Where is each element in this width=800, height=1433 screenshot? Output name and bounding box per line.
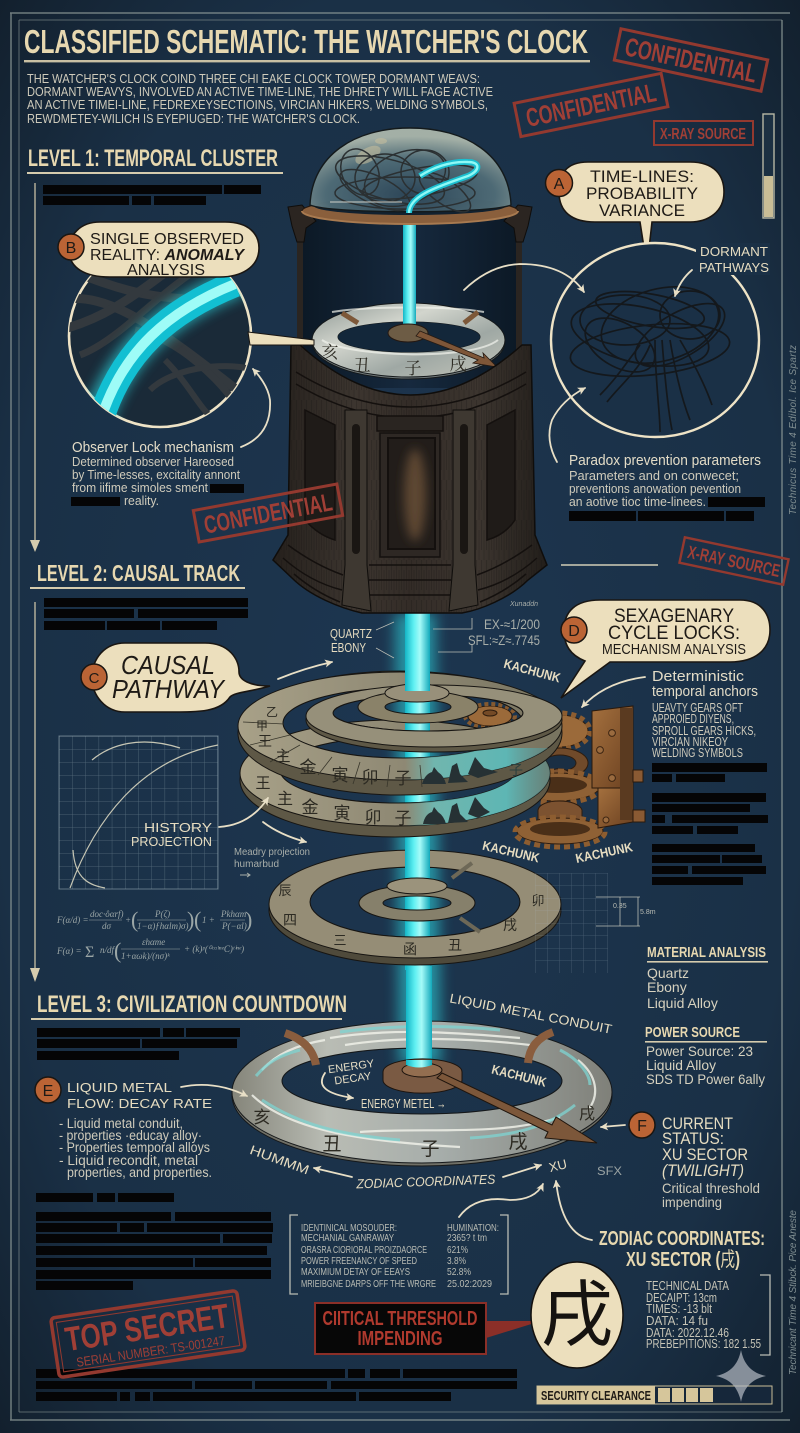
- spec readout: SFL:≈Z≈.7745: [468, 633, 540, 648]
- data table: 2365? t tm: [447, 1232, 487, 1244]
- security clearance bar: SECURITY CLEARANCE: [541, 1388, 651, 1403]
- data table: POWER FREENANCY OF SPEED: [301, 1255, 417, 1267]
- arrow: table to xu: [459, 1184, 543, 1217]
- material analysis: Liquid Alloy: [647, 995, 718, 1011]
- label: energy metel: ENERGY METEL →: [361, 1096, 446, 1111]
- callout E: liquid metal flow: LIQUID METAL: [67, 1080, 172, 1095]
- magnifier A: dormant pathways: [551, 243, 759, 437]
- data table: 25.02:2029: [447, 1278, 492, 1290]
- formulas: [56, 907, 252, 963]
- formulas: (: [114, 938, 121, 963]
- upper sexagenary ring: 王: [258, 733, 272, 749]
- callout A: time-lines: [546, 162, 724, 267]
- power source: Power Source: 23: [646, 1043, 753, 1059]
- zodiac glyphs: 亥: [254, 1108, 270, 1127]
- data table: MECHANIAL GANRAWAY: [301, 1232, 394, 1244]
- intro text: DORMANT WEAVYS, INVOLVED AN ACTIVE TIME-LINE, THE DHRETY WILL FAGE ACTIVE: [27, 85, 493, 99]
- zodiac glyphs: 戌: [508, 1131, 528, 1153]
- callout E: liquid metal flow: FLOW: DECAY RATE: [67, 1096, 212, 1111]
- arrow to magnifier A: [464, 264, 584, 292]
- callout F: current status: XU SECTOR: [662, 1145, 748, 1164]
- text: observer lock: Determined observer Hareosed: [72, 455, 234, 469]
- redacted text level 2: [44, 598, 248, 630]
- clock tower: [273, 128, 547, 613]
- heading: level 2: LEVEL 2: CAUSAL TRACK: [37, 560, 240, 586]
- power source: Liquid Alloy: [646, 1057, 716, 1073]
- lower history ring: 主: [277, 790, 293, 808]
- data table: MRIEIBGNE DARPS OFF THE WRGRE: [301, 1278, 436, 1290]
- stamp: x-ray source: X-RAY SOURCE: [660, 126, 746, 143]
- silver ring: 戌: [450, 350, 466, 375]
- technical data: TIMES: -13 blt: [646, 1301, 712, 1316]
- front lip of rim: [302, 211, 518, 224]
- stamp: x-ray source: [654, 121, 753, 145]
- formulas: Pkhαm: [220, 909, 247, 919]
- data table: MAXIMIUM DETAY OF EEAYS: [301, 1266, 410, 1278]
- redacted text right column: [652, 763, 768, 885]
- arrow: liquid metal flow: [181, 1085, 247, 1096]
- copper rim: [302, 197, 518, 224]
- text: paradox prevention: preventions anowation pevention: [569, 482, 741, 496]
- note: meadry projection: humarbud: [234, 859, 279, 870]
- arrow: causal pathway: [278, 662, 332, 679]
- silver ring: 亥: [322, 338, 338, 363]
- spec readout: Xunaddn: [509, 601, 538, 608]
- hub and needle: [388, 324, 497, 367]
- arrow: deterministic anchors: [582, 677, 645, 707]
- beam between rings: [405, 720, 430, 760]
- small grid with dimensions: 0.35: [613, 903, 627, 910]
- label: energy decay: DECAY: [334, 1070, 373, 1087]
- formulas: P(−αl): [221, 921, 247, 931]
- lower history ring: [240, 720, 550, 837]
- silver ring: [312, 303, 505, 379]
- material analysis: Quartz: [647, 965, 689, 981]
- callout A: time-lines: VARIANCE: [599, 201, 685, 220]
- upper sexagenary ring: 主: [275, 748, 291, 765]
- upper sexagenary ring: 寅: [332, 766, 348, 785]
- lower zodiac ring: 辰: [278, 883, 292, 898]
- note: meadry projection: Meadry projection: [234, 847, 310, 858]
- redacted text level 1: [43, 185, 261, 205]
- lower zodiac ring: 四: [283, 912, 297, 928]
- callout F: current status: CURRENT: [662, 1114, 733, 1133]
- middle inner ring: [306, 685, 562, 752]
- redacted text block lower left: [36, 1193, 273, 1290]
- label: hummm: HUMMM: [248, 1142, 311, 1177]
- callout C: causal pathway: PATHWAY: [112, 674, 226, 704]
- data table: [290, 1215, 508, 1294]
- callout F: current status: [601, 1112, 760, 1210]
- upper sexagenary ring: 子: [394, 769, 412, 788]
- spec readout: [433, 601, 540, 652]
- silver ring: 子: [404, 354, 422, 379]
- gauge: [763, 114, 774, 218]
- callout F: current status: STATUS:: [662, 1129, 724, 1148]
- redacted text bottom: [36, 1369, 517, 1401]
- stamp: top secret: TOP SECRET: [63, 1297, 232, 1359]
- upper sexagenary ring: [238, 671, 562, 795]
- power source: [645, 1024, 767, 1087]
- list: liquid metal properties: - Properties temporal alloys: [59, 1140, 210, 1155]
- liquid metal ring: [232, 1021, 612, 1166]
- text: deterministic anchors: UEAVTY GEARS OFT: [652, 701, 743, 715]
- graph: [59, 736, 218, 889]
- data table: 3.8%: [447, 1255, 466, 1267]
- stamp: confidential 2: CONFIDENTIAL: [523, 77, 659, 133]
- callout A: time-lines: PROBABILITY: [586, 184, 698, 203]
- divider right: [561, 564, 658, 566]
- stamp: confidential 1: [614, 29, 768, 91]
- zodiac medallion: 戌: [541, 1256, 613, 1361]
- lower history ring: 卯: [364, 808, 382, 827]
- label: dormant pathways: PATHWAYS: [699, 260, 769, 275]
- tower body: [273, 345, 547, 613]
- lower history ring: 金: [302, 798, 318, 817]
- arrow: heading to xu: [556, 1181, 592, 1240]
- arrow: history to ring: [219, 798, 268, 827]
- zodiac glyphs: [254, 1105, 595, 1160]
- side annotations: Technicant Time 4 Stibck. Pice Aneste: [788, 1210, 799, 1375]
- text: paradox prevention: Parameters and on conwecet;: [569, 469, 739, 483]
- text: deterministic anchors: [652, 668, 758, 760]
- label: liquid metal conduit: LIQUID METAL CONDUIT: [448, 990, 613, 1037]
- material callouts: quartz, ebony: EBONY: [331, 640, 366, 655]
- text: deterministic anchors: SPROLL GEARS HICKS,: [652, 724, 756, 738]
- text: observer lock: [71, 440, 244, 508]
- text: deterministic anchors: VIRCIAN NIKEOY: [652, 735, 728, 749]
- upper sexagenary ring: 卯: [362, 768, 378, 787]
- lower zodiac ring: 三: [333, 933, 347, 948]
- label: history projection: [131, 820, 212, 849]
- technical data: DECAIPT: 13cm: [646, 1290, 717, 1305]
- lower zodiac ring: 卯: [531, 893, 545, 908]
- intro text: REWDMETEY-WILICH IS EYEPIUGED: THE WATCHER'S CLOCK.: [27, 112, 360, 126]
- callout B: single observed reality: SINGLE OBSERVED: [90, 231, 244, 248]
- text: observer lock: by Time-lesses, excitality annont: [72, 468, 240, 482]
- list: liquid metal properties: - properties ·educay alloy·: [59, 1128, 202, 1143]
- label: kachunk ring: KACHUNK: [490, 1062, 549, 1090]
- formulas: 1+αωk)/(nσ)ᵏ: [121, 951, 170, 961]
- intro text: [27, 72, 493, 126]
- upper sexagenary ring: 甲: [256, 719, 268, 733]
- formulas: 1 +: [202, 915, 215, 925]
- hub and pointer: [383, 1059, 597, 1143]
- text: paradox prevention: an aotive tioc time-linees.: [569, 495, 706, 509]
- callout B: single observed reality: B: [66, 240, 76, 257]
- material analysis: Ebony: [647, 979, 687, 995]
- label: history projection: HISTORY: [144, 820, 212, 835]
- warning box: critical threshold: CIITICAL THRESHOLD: [322, 1308, 478, 1330]
- text: deterministic anchors: WELDING SYMBOLS: [652, 746, 743, 760]
- stamp: confidential 2: [514, 73, 668, 137]
- stamp: top secret: [51, 1290, 245, 1378]
- flow line level 1 to 2: [30, 183, 40, 552]
- text: deterministic anchors: APPROIED DIYENS,: [652, 712, 734, 726]
- text: paradox prevention: [569, 453, 765, 521]
- arrow: to xu: [503, 1165, 541, 1177]
- lower history ring: 寅: [334, 804, 350, 823]
- upper sexagenary ring: 金: [300, 758, 316, 777]
- heading: zodiac coordinates xu sector: [599, 1228, 765, 1272]
- arrow: to hummm: [314, 1168, 352, 1177]
- arrow: observer lock: [241, 369, 270, 447]
- text: observer lock: Observer Lock mechanism: [72, 440, 234, 456]
- note: meadry projection: [234, 847, 310, 877]
- callout D: sexagenary cycle locks: D: [568, 623, 580, 640]
- callout C: causal pathway: [81, 643, 270, 712]
- zodiac glyphs: 戌: [579, 1105, 595, 1123]
- technical data: PREBEPITIONS: 182 1.55: [646, 1336, 761, 1351]
- formulas: εhαme: [142, 937, 165, 947]
- stamp: top secret: SERIAL NUMBER: TS-001247: [75, 1333, 226, 1370]
- power source: POWER SOURCE: [645, 1024, 740, 1041]
- lower history ring: 王: [255, 775, 271, 792]
- label: energy decay: [327, 1058, 377, 1088]
- callout B: single observed reality: REALITY: ANOMALY: [90, 247, 245, 264]
- label: kachunk left: KACHUNK: [481, 838, 541, 866]
- zodiac glyphs: 子: [420, 1139, 440, 1160]
- security clearance bar: [537, 1386, 772, 1404]
- spec readout: EX-≈1/200: [484, 617, 540, 632]
- data table: 621%: [447, 1244, 468, 1256]
- icon: sparkle watermark: [716, 1350, 766, 1402]
- label: dormant pathways: [696, 243, 770, 275]
- material analysis: [647, 944, 768, 1011]
- callout A: time-lines: A: [554, 176, 565, 193]
- formulas: +: [125, 915, 131, 925]
- formulas: n/df: [100, 945, 116, 955]
- text: observer lock: reality.: [124, 494, 159, 508]
- label: xu: XU: [547, 1156, 568, 1175]
- heading: level 1: LEVEL 1: TEMPORAL CLUSTER: [28, 145, 278, 172]
- technical data: [646, 1275, 770, 1355]
- bracket plate: [592, 706, 645, 828]
- formulas: Σ: [85, 944, 94, 961]
- lower beam: [395, 613, 441, 1065]
- text: deterministic anchors: temporal anchors: [652, 683, 758, 700]
- upper sexagenary ring: 乙: [266, 705, 278, 719]
- data table: ORASRA CIORIORAL PROIZDAORCE: [301, 1244, 427, 1256]
- label: dormant pathways: DORMANT: [700, 244, 768, 259]
- lower history ring: 子: [394, 809, 412, 828]
- callout B: single observed reality: ANALYSIS: [127, 262, 205, 279]
- formulas: + (k)ᵖ(⁰ᶜᵃˡⁿᵉC)ᵗⁱⁿᵉ): [184, 944, 244, 954]
- connector from ring to magnifier B: [248, 332, 314, 345]
- data table: IDENTINICAL MOSOUDER:: [301, 1222, 397, 1234]
- callout F: current status: F: [637, 1118, 647, 1135]
- arrow: ring to projection note: [263, 822, 306, 842]
- zodiac glyphs: 丑: [322, 1134, 342, 1155]
- small grid with dimensions: [535, 873, 656, 973]
- glass cylinder: [288, 205, 532, 388]
- label: sfx: SFX: [597, 1164, 622, 1178]
- callout C: causal pathway: CAUSAL: [121, 650, 215, 680]
- beam over ring: [406, 966, 432, 1064]
- formulas: dσ: [102, 921, 112, 931]
- formulas: 1−α)ƒhαlm)σ): [137, 921, 188, 931]
- side annotations: [788, 345, 799, 1375]
- material analysis: MATERIAL ANALYSIS: [647, 944, 766, 961]
- list: liquid metal properties: - Liquid recondit, metal: [59, 1153, 198, 1168]
- lower zodiac ring: 戌: [503, 917, 517, 933]
- warning box: critical threshold: IMPENDING: [358, 1328, 442, 1350]
- text: paradox prevention: Paradox prevention parameters: [569, 453, 761, 469]
- back gear: [465, 704, 515, 728]
- list: liquid metal properties: - Liquid metal conduit,: [59, 1116, 183, 1131]
- data table: 52.8%: [447, 1266, 471, 1278]
- technical data: DATA: 2022.12.46: [646, 1325, 729, 1340]
- intro text: THE WATCHER'S CLOCK COIND THREE CHI EAKE CLOCK TOWER DORMANT WEAVS:: [27, 72, 480, 86]
- formulas: F(α) =: [56, 946, 82, 956]
- callout D: sexagenary cycle locks: CYCLE LOCKS:: [608, 623, 740, 644]
- formulas: ): [187, 907, 194, 932]
- gear mechanism: [465, 704, 645, 847]
- label: kachunk top: KACHUNK: [502, 656, 563, 686]
- formulas: (: [131, 907, 138, 932]
- ring body: [232, 1021, 612, 1166]
- label: energy decay: ENERGY: [327, 1058, 376, 1076]
- material callouts: quartz, ebony: QUARTZ: [330, 626, 372, 641]
- data table: HUMINATION:: [447, 1222, 499, 1234]
- heading: zodiac coordinates xu sector: XU SECTOR (戌): [626, 1243, 740, 1272]
- formulas: doc·ôαrf): [90, 909, 123, 919]
- callout E: liquid metal flow: [35, 1077, 212, 1111]
- flow line level 2 to 3: [30, 602, 40, 982]
- beam collar disc: [385, 684, 449, 702]
- clamps: [285, 1032, 553, 1065]
- stamp: confidential 3: [193, 484, 343, 542]
- lower gear: [515, 801, 605, 847]
- warning box: critical threshold: [315, 1303, 541, 1354]
- callout D: sexagenary cycle locks: MECHANISM ANALYSIS: [602, 641, 746, 658]
- middle gear: [513, 748, 601, 803]
- formulas: F(α/d) =: [56, 915, 89, 925]
- callout F: current status: (TWILIGHT): [662, 1161, 744, 1180]
- callout F: current status: Critical threshold: [662, 1180, 760, 1196]
- side annotations: Technicus Time 4 Edibol. Ice Spartz: [788, 345, 799, 515]
- list: liquid metal properties: properties, and properties.: [67, 1165, 212, 1180]
- material callouts: quartz, ebony: [330, 622, 394, 658]
- silver ring: 丑: [354, 351, 370, 376]
- arrow: energy decay: [322, 1073, 353, 1098]
- technical data: DATA: 14 fu: [646, 1313, 708, 1328]
- lower zodiac ring: [269, 842, 561, 965]
- callout B: single observed reality: [58, 222, 259, 279]
- technical data: TECHNICAL DATA: [646, 1278, 729, 1293]
- magnifier B: single observed reality: [68, 276, 252, 428]
- heading: level 3: LEVEL 3: CIVILIZATION COUNTDOWN: [37, 991, 347, 1018]
- inner beam: [403, 162, 477, 329]
- text: deterministic anchors: Deterministic: [652, 668, 745, 685]
- power source: SDS TD Power 6ally: [646, 1071, 765, 1087]
- list: liquid metal properties: [59, 1116, 212, 1180]
- label: zodiac coordinates: ZODIAC COORDINATES: [355, 1172, 496, 1191]
- upper sexagenary ring: 子: [509, 762, 523, 778]
- formulas: P(ζ): [154, 909, 170, 919]
- top gear: [530, 713, 590, 749]
- lower zodiac ring: 函: [403, 941, 417, 957]
- dome: [310, 128, 511, 219]
- lower zodiac ring: 丑: [448, 937, 462, 953]
- beam above rings: [405, 640, 430, 692]
- redacted text level 3: [37, 1028, 240, 1060]
- formulas: ): [245, 907, 252, 932]
- callout A: time-lines: TIME-LINES:: [590, 167, 694, 186]
- label: kachunk right: KACHUNK: [574, 839, 635, 866]
- callout E: liquid metal flow: E: [43, 1083, 53, 1100]
- label: history projection: PROJECTION: [131, 834, 212, 849]
- small grid with dimensions: 5.8m: [640, 909, 656, 916]
- callout D: sexagenary cycle locks: SEXAGENARY: [614, 606, 734, 627]
- callout D: sexagenary cycle locks: [561, 600, 770, 698]
- callout F: current status: impending: [662, 1194, 722, 1210]
- text: observer lock: from iifime simoles sment: [72, 481, 209, 495]
- callout C: causal pathway: C: [89, 670, 100, 687]
- intro text: AN ACTIVE TIMEI-LINE, FEDREXEYSECTIOINS, VIRCIAN HIKERS, WELDING SYMBOLS,: [27, 98, 488, 112]
- formulas: (: [194, 907, 201, 932]
- arrow to dormant pathways: [675, 270, 692, 296]
- stamp: confidential 3: CONFIDENTIAL: [202, 488, 335, 540]
- arrow: paradox prevention: [549, 388, 585, 462]
